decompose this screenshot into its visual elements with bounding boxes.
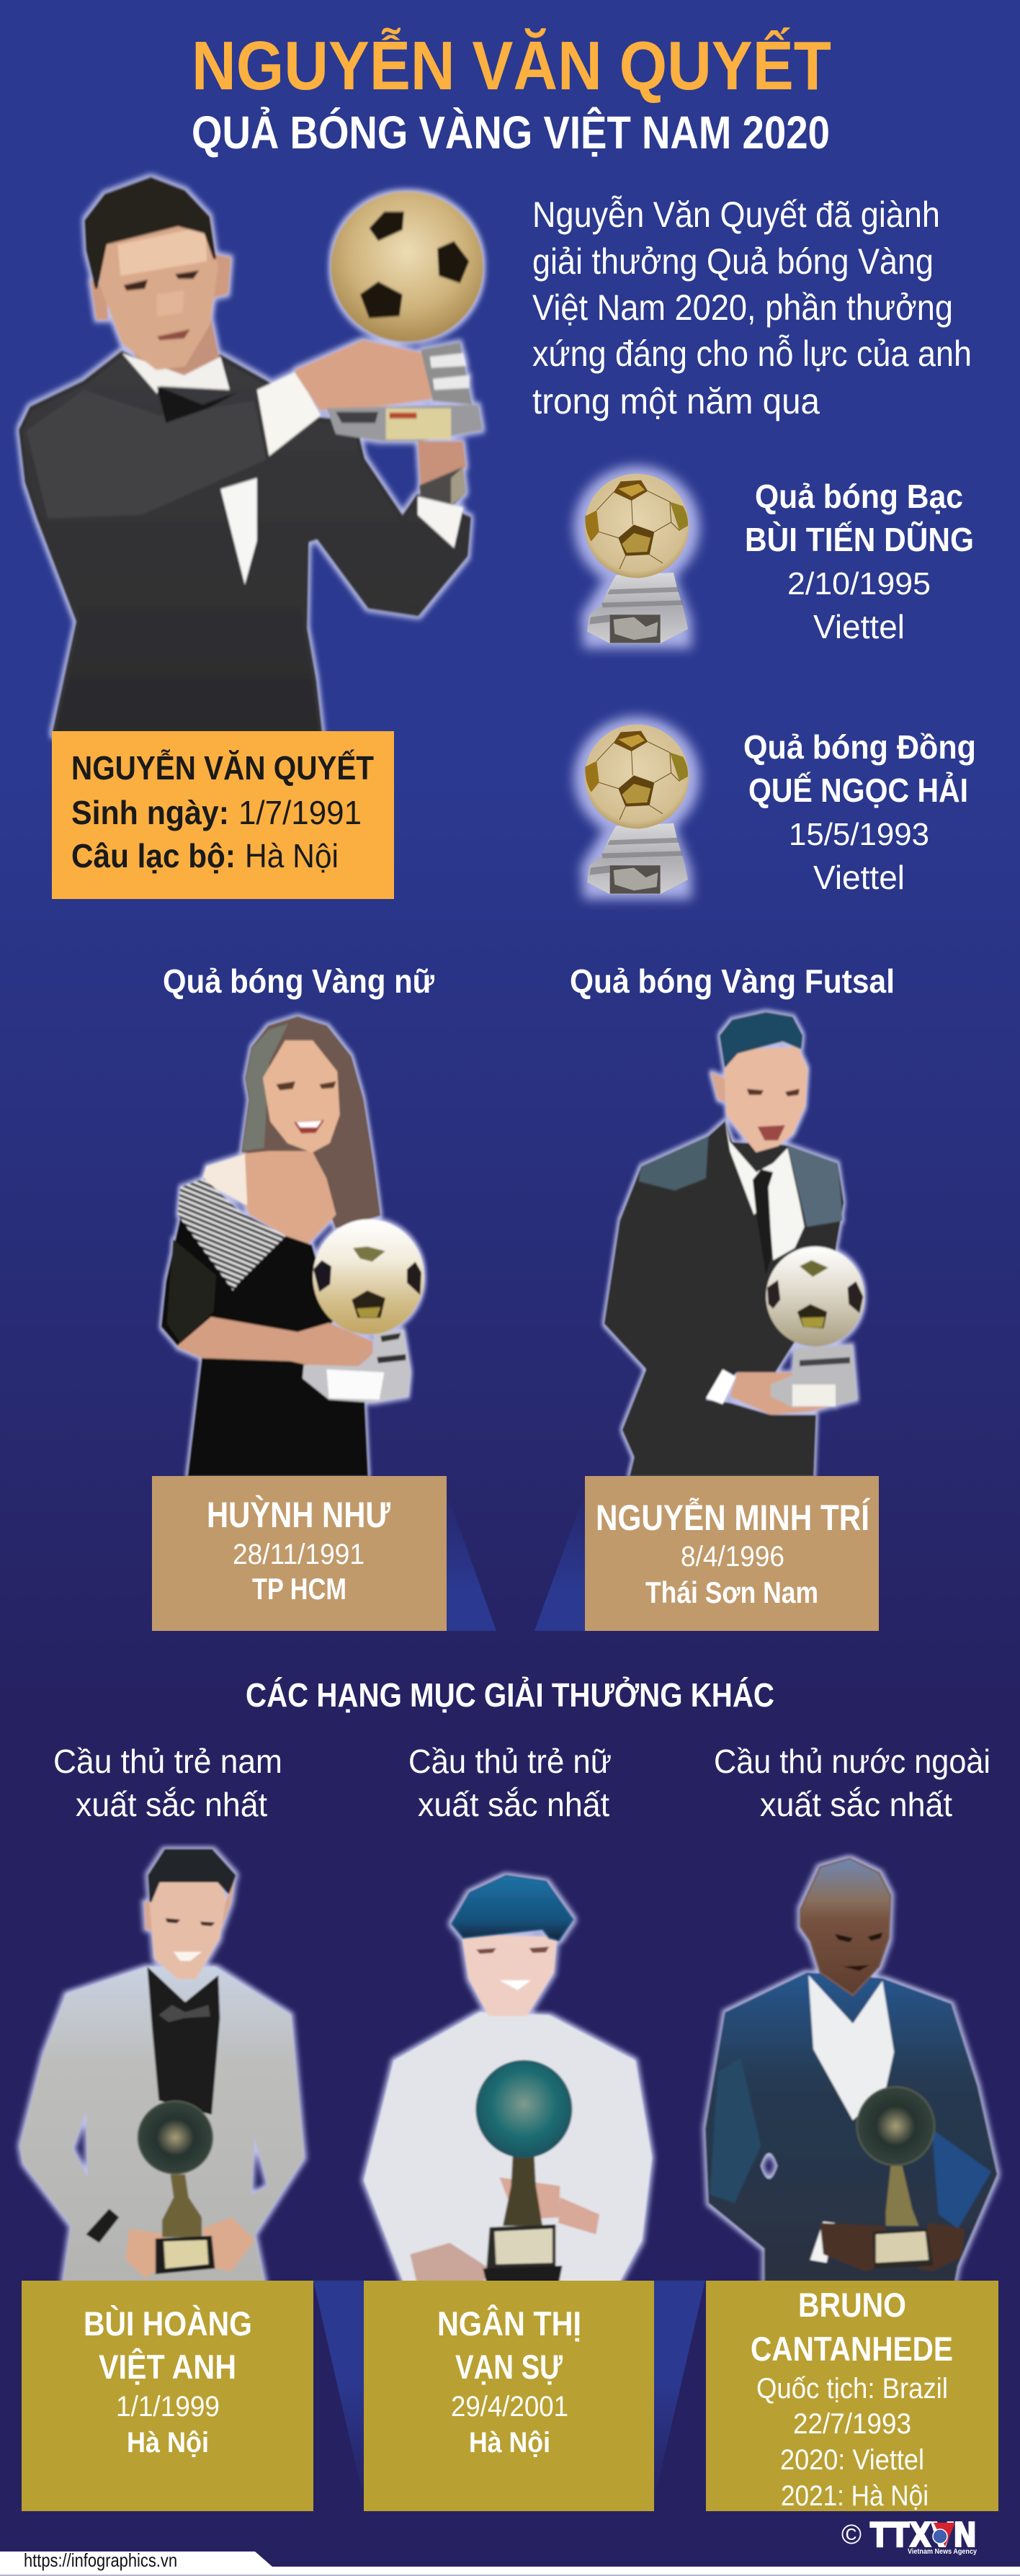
ears: [144, 1878, 235, 1931]
trophy base: [486, 2224, 555, 2271]
face: [463, 1936, 555, 2015]
website url: https://infographics.vn: [24, 2549, 177, 2571]
subtitle: QUẢ BÓNG VÀNG VIỆT NAM 2020: [192, 106, 830, 158]
photo: Huỳnh Như with trophy: [161, 1018, 424, 1477]
icon: bronze ball trophy: [574, 717, 699, 899]
panel: Bùi Hoàng Việt Anh card: 1/1/1999: [116, 2391, 220, 2423]
watch: [419, 467, 466, 507]
intro paragraph: giải thưởng Quả bóng Vàng: [532, 241, 934, 282]
copyright mark: ©: [841, 2520, 862, 2550]
sleeve cuff: [257, 372, 321, 456]
chest skin: [228, 1151, 336, 1245]
trophy stem and base: [303, 1330, 411, 1403]
triangle accent: [313, 2281, 364, 2500]
suit: [604, 1121, 844, 1477]
trophy ball: [856, 2086, 935, 2166]
panel: Bùi Hoàng Việt Anh card: BÙI HOÀNG: [84, 2304, 252, 2343]
blue hair: [452, 1875, 573, 1941]
panel: Bruno Cantanhede card: 2021: Hà Nội: [781, 2480, 929, 2512]
trophy stem: [886, 2166, 918, 2226]
trophy base: [771, 1345, 857, 1407]
TTXVN logo: TTXVN: [870, 2515, 977, 2554]
trophy stem: [162, 2175, 202, 2237]
shoulder sheen: [639, 1136, 708, 1191]
lower forearm: [418, 442, 466, 493]
bronze ball winner text: QUẾ NGỌC HẢI: [748, 772, 968, 809]
hair: [243, 1018, 380, 1227]
collar: [122, 353, 230, 393]
hair: [149, 1850, 235, 1901]
arm and hand: [178, 1318, 372, 1369]
trophy ball: [138, 2101, 213, 2175]
shirt: [725, 1121, 805, 1260]
trophy ball: [313, 1220, 424, 1334]
sleeve sheen: [932, 2129, 991, 2229]
suit body and arms: [20, 353, 469, 733]
globe emblem: [934, 2523, 955, 2546]
panel: Ngân Thị Vạn Sự card: VẠN SỰ: [455, 2348, 563, 2386]
panel: Huỳnh Như card: 28/11/1991: [233, 1539, 364, 1570]
white shoulder: [202, 1154, 247, 1206]
face: [264, 1042, 339, 1151]
bow: [158, 2005, 210, 2022]
photo: Ngân Thị Vạn Sự: [364, 1875, 652, 2283]
intro paragraph: [532, 194, 972, 421]
white shirt: [364, 2012, 652, 2283]
grey suit: [20, 1967, 304, 2283]
cuff: [810, 2222, 835, 2263]
panel: Bùi Hoàng Việt Anh card: [22, 2281, 364, 2511]
panel: Bruno Cantanhede card: [706, 2281, 998, 2512]
black shirt: [147, 1967, 220, 2115]
title: [192, 27, 831, 158]
forearm: [558, 2197, 599, 2235]
black dress: [161, 1217, 369, 1477]
panel: Bruno Cantanhede card: 22/7/1993: [793, 2408, 911, 2440]
trophy base: [872, 2229, 934, 2268]
bronze ball winner text: Viettel: [813, 859, 905, 896]
intro paragraph: xứng đáng cho nỗ lực của anh: [532, 334, 972, 374]
triangle accent: [654, 2281, 705, 2500]
category label: best young female player: Cầu thủ trẻ nữ: [408, 1743, 612, 1780]
panel: Ngân Thị Vạn Sự card: 29/4/2001: [451, 2391, 568, 2423]
panel: Nguyễn Minh Trí card: Thái Sơn Nam: [645, 1575, 818, 1609]
photo: Nguyễn Minh Trí with trophy: [604, 1013, 864, 1477]
icon: silver ball trophy: [574, 466, 699, 648]
black cuff: [86, 2209, 119, 2243]
tie: [753, 1169, 773, 1275]
panel: Ngân Thị Vạn Sự card: [364, 2281, 705, 2511]
intro paragraph: Nguyễn Văn Quyết đã giành: [532, 194, 940, 235]
cuff: [706, 1369, 736, 1404]
panel: Bùi Hoàng Việt Anh card: VIỆT ANH: [99, 2348, 236, 2386]
heading: other award categories: CÁC HẠNG MỤC GIẢI THƯỞNG KHÁC: [246, 1676, 774, 1714]
head: [800, 1859, 891, 1995]
bronze ball winner text: 15/5/1993: [789, 817, 929, 852]
panel: Nguyễn Minh Trí card: NGUYỄN MINH TRÍ: [596, 1498, 870, 1538]
footer bar: [0, 2549, 1020, 2576]
panel: Huỳnh Như card: [152, 1476, 496, 1631]
silver ball winner text: Viettel: [813, 608, 905, 645]
bow tie: [157, 386, 238, 423]
trophy stem: [503, 2155, 542, 2226]
title: NGUYỄN VĂN QUYẾT: [192, 27, 831, 104]
photo: Bùi Hoàng Việt Anh: [20, 1850, 304, 2283]
panel: Ngân Thị Vạn Sự card: NGÂN THỊ: [437, 2304, 581, 2343]
panel: Nguyễn Văn Quyết profile: 1/7/1991: [238, 794, 362, 831]
panel: Nguyễn Minh Trí card: [534, 1476, 879, 1631]
panel: Huỳnh Như card: HUỲNH NHƯ: [207, 1495, 390, 1535]
sequin shoulder: [178, 1179, 286, 1290]
trophy base: [327, 405, 483, 442]
trophy base: [156, 2236, 215, 2274]
face: [151, 1881, 225, 1978]
hands: [730, 1372, 855, 1415]
panel: Bùi Hoàng Việt Anh card: Hà Nội: [127, 2427, 209, 2459]
panel: Nguyễn Văn Quyết profile: Câu lạc bộ:: [71, 837, 236, 875]
hands: [125, 2217, 255, 2278]
panel: Nguyễn Văn Quyết profile: [52, 731, 394, 899]
face: [725, 1048, 807, 1151]
photo: Nguyễn Văn Quyết holding trophy: [20, 179, 483, 733]
heading: women's golden ball: Quả bóng Vàng nữ: [163, 962, 435, 1000]
heading: futsal golden ball: Quả bóng Vàng Futsal: [570, 962, 895, 1000]
gold ball: [331, 192, 483, 342]
silver ball winner text: 2/10/1995: [787, 566, 931, 601]
panel: Ngân Thị Vạn Sự card: Hà Nội: [469, 2427, 550, 2459]
right cuff: [418, 496, 463, 548]
intro paragraph: Việt Nam 2020, phần thưởng: [532, 287, 953, 328]
raised hand: [296, 342, 430, 408]
TTXVN logo: [841, 2515, 977, 2556]
right hand: [499, 2178, 560, 2220]
category label: best young male player: xuất sắc nhất: [76, 1786, 267, 1823]
shirt panel: [220, 478, 257, 585]
silver ball winner text: Quả bóng Bạc: [755, 478, 963, 515]
panel: Nguyễn Minh Trí card: 8/4/1996: [681, 1541, 784, 1573]
category label: best foreign player: [714, 1743, 990, 1823]
TTXVN logo: Vietnam News Agency: [908, 2548, 977, 2556]
bronze ball winner text: [743, 728, 976, 896]
panel: Bruno Cantanhede card: CANTANHEDE: [751, 2330, 953, 2368]
panel: Bruno Cantanhede card: BRUNO: [798, 2286, 906, 2324]
category label: best young female player: [408, 1743, 612, 1823]
bronze ball winner text: Quả bóng Đồng: [743, 728, 976, 766]
shirt: [808, 1975, 894, 2121]
panel: Nguyễn Văn Quyết profile: NGUYỄN VĂN QUYẾT: [71, 749, 374, 787]
triangle accent: [534, 1493, 585, 1631]
left hand: [410, 2243, 490, 2283]
panel: Nguyễn Văn Quyết profile: Hà Nội: [245, 837, 339, 875]
triangle accent: [447, 1493, 496, 1631]
trophy ball: [475, 2060, 572, 2158]
navy suit: [705, 1972, 998, 2283]
face: [97, 217, 216, 368]
hair: [86, 179, 215, 287]
category label: best young male player: Cầu thủ trẻ nam: [53, 1743, 282, 1780]
photo: Bruno Cantanhede: [705, 1859, 998, 2283]
trophy stem: [421, 342, 473, 405]
category label: best young male player: [53, 1743, 282, 1823]
silver ball winner text: BÙI TIẾN DŨNG: [745, 521, 974, 558]
ear: [711, 1072, 725, 1102]
intro paragraph: trong một năm qua: [532, 381, 820, 421]
panel: Bruno Cantanhede card: 2020: Viettel: [780, 2444, 924, 2476]
category label: best foreign player: xuất sắc nhất: [760, 1786, 952, 1823]
panel: Huỳnh Như card: TP HCM: [252, 1572, 346, 1606]
trophy ball: [766, 1246, 864, 1346]
blue hair: [720, 1013, 802, 1066]
panel: Bruno Cantanhede card: Quốc tịch: Brazil: [756, 2373, 948, 2405]
neck: [124, 320, 220, 386]
hands: [820, 2223, 905, 2271]
ears: [90, 254, 231, 320]
silver ball winner text: [745, 478, 974, 645]
panel: Nguyễn Văn Quyết profile: Sinh ngày:: [71, 794, 229, 831]
category label: best foreign player: Cầu thủ nước ngoài: [714, 1743, 990, 1780]
category label: best young female player: xuất sắc nhất: [418, 1786, 609, 1823]
